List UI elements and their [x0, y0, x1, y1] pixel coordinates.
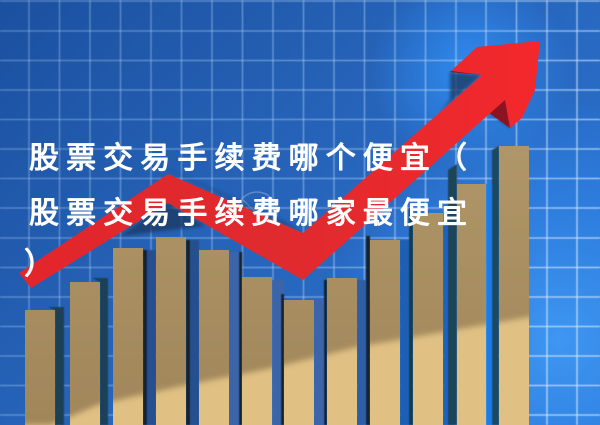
- red trend arrow: [19, 41, 540, 288]
- title line 1: 股票交易手续费哪个便宜（: [29, 142, 467, 175]
- bar chart: tan bars: [25, 146, 529, 425]
- title line 3: ）: [24, 248, 54, 281]
- title line 2: 股票交易手续费哪家最便宜: [29, 197, 467, 230]
- watermark stamp: [237, 192, 277, 232]
- arrow shadow: [120, 72, 510, 236]
- bar shadows: [48, 146, 499, 425]
